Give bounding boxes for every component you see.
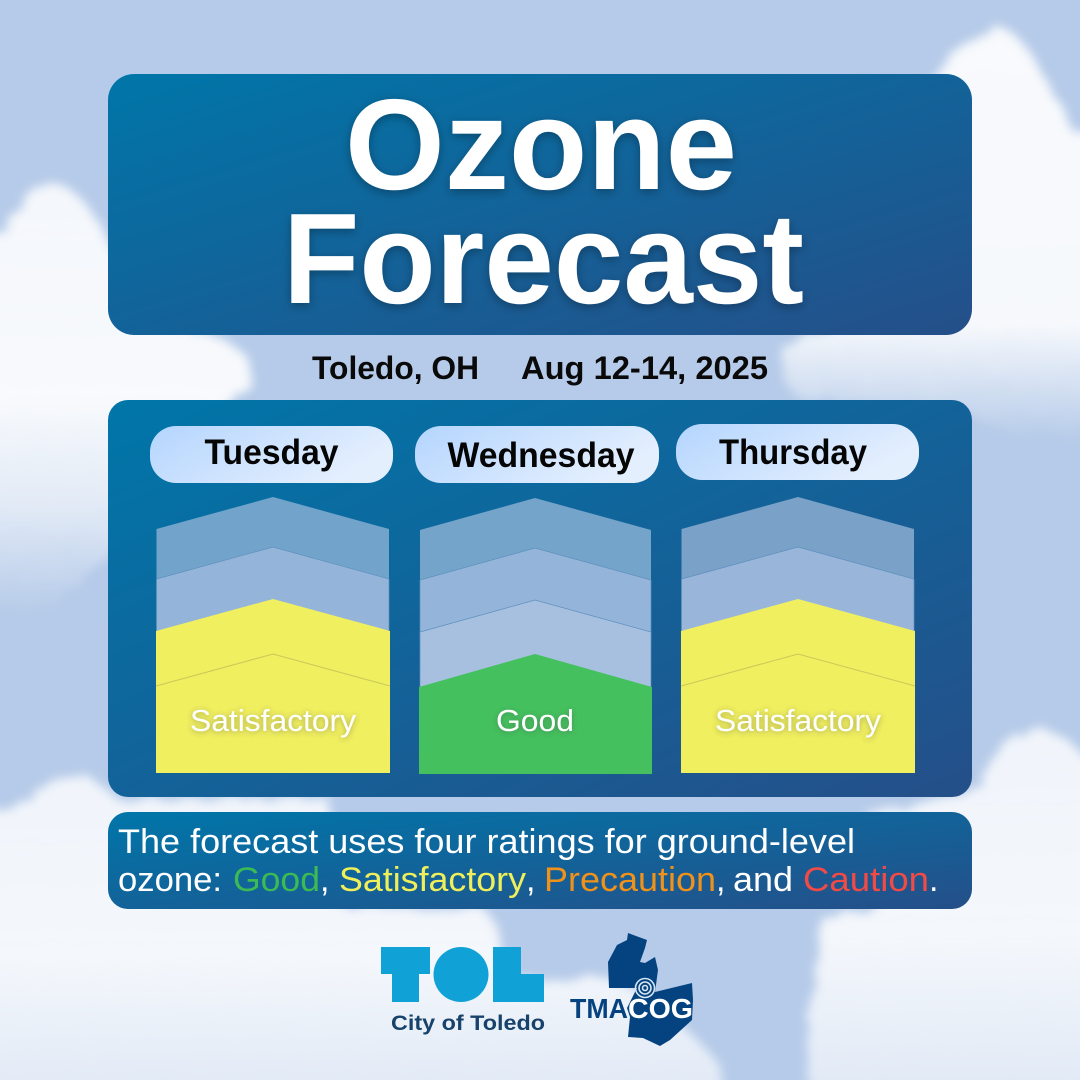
text: forecast ratings explanation: The forecast uses four ratings for ground-level: [118, 823, 855, 861]
text: forecast ratings explanation: .: [929, 861, 938, 899]
map silhouette: [608, 933, 693, 1046]
day label: Wednesday: [415, 426, 659, 483]
rating stack: Wednesday: [419, 498, 652, 774]
column: Tuesday: [150, 426, 393, 773]
icon: concentric rings: [636, 978, 654, 998]
day label: Thursday: Thursday: [719, 433, 867, 472]
text: forecast ratings explanation: ,: [716, 861, 725, 899]
rating stack: Wednesday: Good: [496, 703, 574, 738]
text: forecast ratings explanation: ,: [526, 861, 535, 899]
location and date line: Aug 12-14, 2025: [521, 350, 768, 386]
panel: ratings explanation: [108, 812, 972, 909]
text: forecast ratings explanation: and: [733, 861, 793, 899]
text: forecast ratings explanation: Satisfactory: [339, 861, 526, 899]
day label: Wednesday: Wednesday: [448, 436, 635, 475]
TOL mark: [381, 947, 544, 1002]
logo: TMACOG: [570, 933, 693, 1046]
column: Wednesday: [415, 426, 659, 774]
text: forecast ratings explanation: Good: [233, 861, 320, 899]
title: Ozone Forecast: [283, 73, 804, 331]
day label: Thursday: [676, 424, 919, 480]
logo: City of Toledo: [381, 947, 545, 1035]
text: forecast ratings explanation: ,: [320, 861, 329, 899]
panel: three-day forecast: [108, 400, 972, 797]
logo: City of Toledo: City of Toledo: [391, 1012, 545, 1035]
rating stack: Tuesday: Satisfactory: [190, 703, 357, 738]
location and date line: Toledo, OH: [312, 350, 479, 386]
rating stack: Thursday: Satisfactory: [715, 703, 882, 738]
day label: Tuesday: [150, 426, 393, 483]
title: Ozone Forecast: Ozone: [345, 73, 737, 217]
day label: Tuesday: Tuesday: [204, 433, 339, 472]
text: forecast ratings explanation: Precaution: [544, 861, 716, 899]
column: Thursday: [676, 424, 919, 773]
location and date line: [312, 350, 768, 386]
rating stack: Thursday: [681, 497, 915, 773]
text: forecast ratings explanation: ozone:: [118, 861, 222, 899]
text: forecast ratings explanation: [118, 823, 938, 899]
title: Ozone Forecast: Forecast: [283, 187, 804, 331]
title panel: [108, 73, 972, 335]
logo: TMACOG: COG: [628, 993, 693, 1024]
logo: TMACOG: TMA: [570, 993, 628, 1024]
rating stack: Tuesday: [156, 497, 390, 773]
text: forecast ratings explanation: Caution: [803, 861, 929, 899]
